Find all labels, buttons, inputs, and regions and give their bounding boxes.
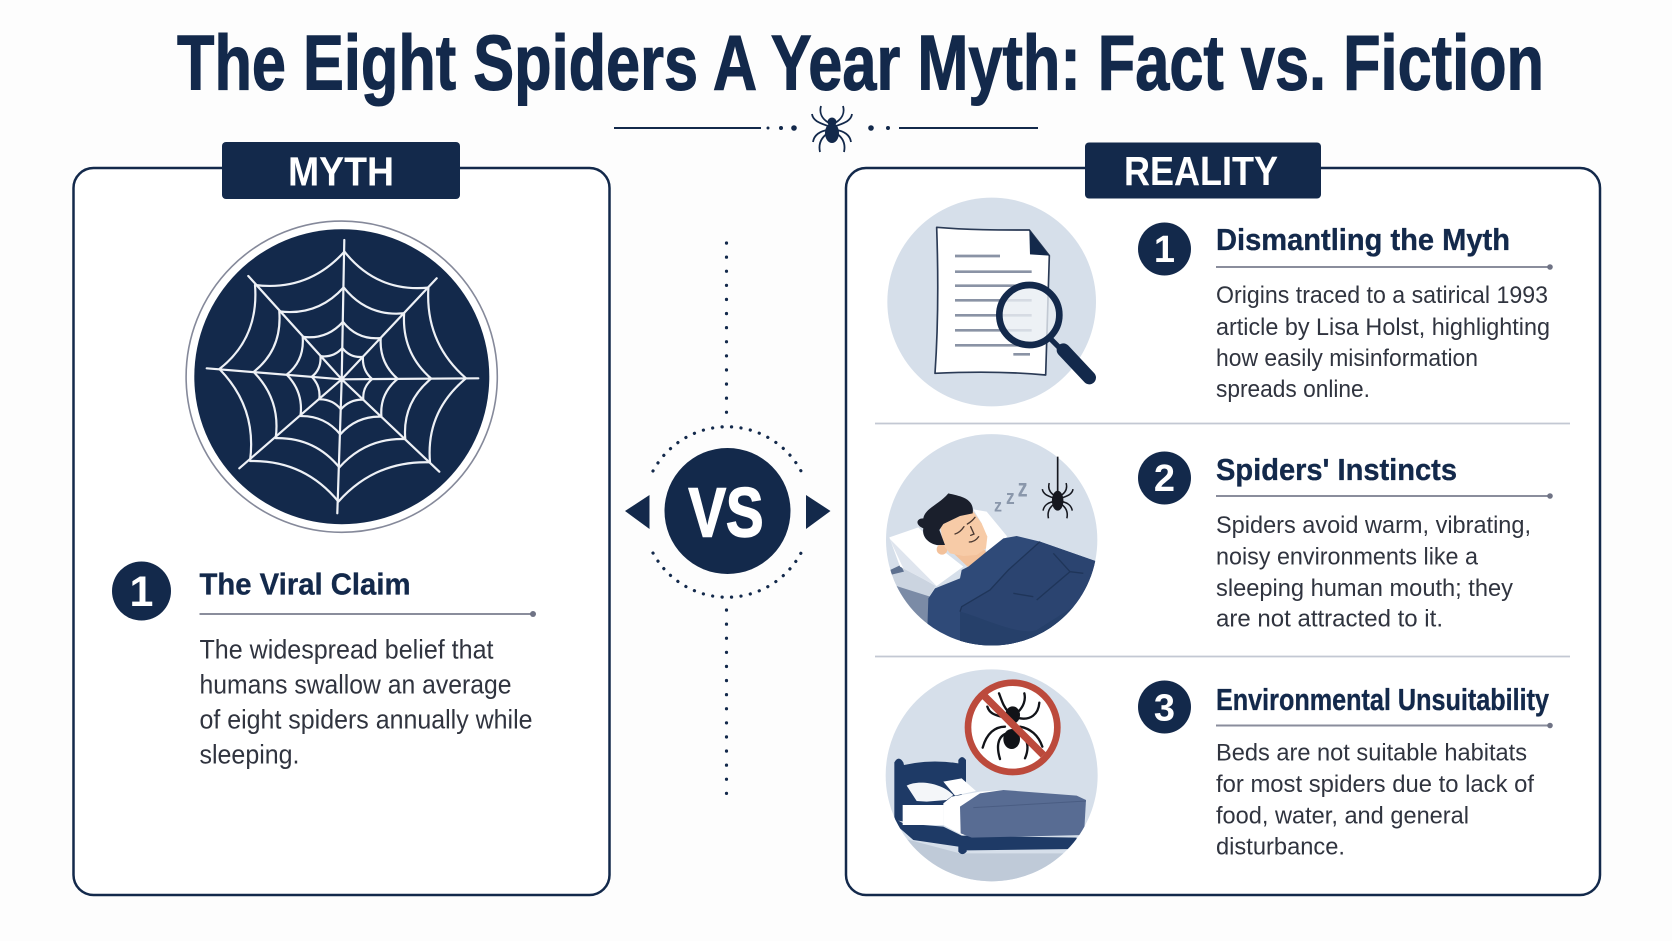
body text: spiders' instincts: Spiders avoid warm, vibrating, [1216, 512, 1531, 539]
body text: environmental unsuitability: disturbance. [1216, 834, 1345, 860]
dotted line top [725, 243, 728, 414]
dotted line bottom [725, 610, 728, 798]
myth tab: MYTH [288, 148, 394, 194]
panel: reality [846, 142, 1600, 895]
body text: environmental unsuitability: for most spiders due to lack of [1216, 771, 1534, 798]
heading: the viral claim: The Viral Claim [200, 566, 410, 602]
reality tab [1085, 142, 1321, 198]
heading: spiders' instincts: Spiders' Instincts [1216, 452, 1457, 487]
heading rule [1216, 493, 1553, 499]
icon: spider web [186, 221, 497, 532]
number badge 3: 3 [1154, 688, 1175, 730]
body text: viral claim [200, 634, 532, 770]
body text: viral claim: sleeping. [200, 740, 300, 770]
number badge 1 [1138, 222, 1191, 276]
panel: myth [74, 142, 610, 895]
body text: spiders' instincts: sleeping human mouth; they [1216, 575, 1514, 602]
body text: viral claim: humans swallow an average [200, 670, 512, 700]
heading rule [1216, 723, 1553, 728]
number badge 1 [112, 562, 171, 620]
illustration: sleeping person with spider: z [1018, 475, 1028, 503]
reality tab: REALITY [1124, 148, 1278, 194]
illustration: sleeping person with spider [886, 434, 1098, 646]
number badge 1: 1 [1154, 229, 1175, 271]
number badge 2: 2 [1154, 458, 1175, 500]
body text: dismantling the myth: spreads online. [1216, 376, 1370, 403]
illustration: sleeping person with spider: z [1006, 487, 1015, 509]
heading rule [1216, 264, 1553, 270]
arrow left [625, 495, 650, 529]
heading rule [200, 611, 536, 617]
title divider with spider icon [614, 106, 1038, 152]
body text: environmental unsuitability: food, water, and general [1216, 802, 1469, 830]
illustration: document and magnifier [887, 198, 1096, 406]
number badge 3 [1138, 680, 1191, 734]
body text: viral claim: of eight spiders annually while [200, 704, 532, 734]
heading: dismantling the myth: Dismantling the Myth [1216, 222, 1510, 257]
body text: dismantling the myth: article by Lisa Holst, highlighting [1216, 314, 1550, 341]
body text: dismantling the myth: how easily misinformation [1216, 345, 1478, 372]
arrow right [806, 495, 830, 529]
body text: spiders' instincts [1216, 512, 1531, 632]
body text: dismantling the myth: Origins traced to a satirical 1993 [1216, 282, 1548, 309]
vs badge [664, 448, 790, 574]
number badge 1: 1 [130, 568, 153, 616]
myth tab [222, 142, 460, 199]
heading: environmental unsuitability: Environmental Unsuitability [1216, 682, 1550, 717]
body text: viral claim: The widespread belief that [200, 634, 494, 664]
body text: dismantling the myth [1216, 282, 1550, 403]
illustration: no spiders sign over bed [880, 665, 1105, 885]
vs divider [625, 243, 830, 798]
body text: environmental unsuitability [1216, 740, 1534, 860]
body text: spiders' instincts: are not attracted to it. [1216, 606, 1443, 632]
vs badge: VS [688, 474, 764, 552]
body text: spiders' instincts: noisy environments like a [1216, 544, 1478, 570]
body text: environmental unsuitability: Beds are not suitable habitats [1216, 740, 1527, 766]
dotted ring [653, 427, 801, 597]
illustration: sleeping person with spider: z [994, 496, 1002, 516]
number badge 2 [1138, 452, 1191, 504]
